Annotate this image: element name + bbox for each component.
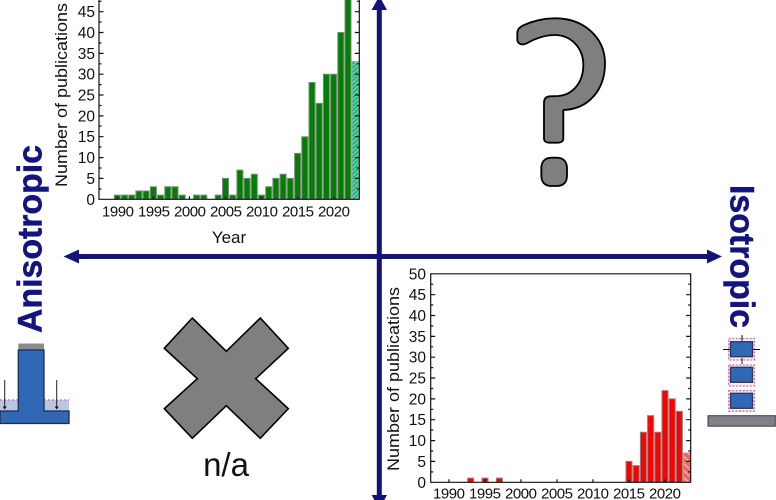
y axis tick labels: 45 xyxy=(409,287,426,304)
pillar and base xyxy=(0,350,69,424)
icon: isotropic stacked blocks on plate xyxy=(708,335,775,426)
y axis tick labels xyxy=(78,4,95,209)
y axis tick labels: 25 xyxy=(409,370,426,388)
arrow: vertical double-headed axis xyxy=(372,0,387,500)
y axis title: Number of publications xyxy=(53,3,71,187)
x axis tick labels: 2010 xyxy=(246,204,278,220)
y axis tick labels: 20 xyxy=(78,108,95,125)
y axis tick labels: 25 xyxy=(78,88,95,104)
y axis tick labels: 0 xyxy=(417,475,426,492)
x axis tick labels: 1995 xyxy=(138,204,170,220)
x axis tick labels: 2015 xyxy=(282,204,314,220)
heading: Isotropic: Isotropic xyxy=(723,185,761,328)
x axis tick labels xyxy=(102,204,350,220)
x axis title: Year xyxy=(212,228,247,247)
y axis tick labels: 30 xyxy=(409,350,426,367)
pillar cap xyxy=(18,344,44,350)
y axis title: Number of publications xyxy=(385,287,403,471)
label: n/a: n/a xyxy=(203,446,250,483)
top block with pink dashed shell xyxy=(729,338,754,360)
axes and ticks xyxy=(431,274,691,482)
y axis tick labels: 40 xyxy=(78,25,95,42)
bar: 2023 partial year, hatched xyxy=(352,62,358,199)
y axis tick labels: 5 xyxy=(417,454,426,471)
liquid layer xyxy=(0,400,69,411)
chart: anisotropic publications per year xyxy=(53,0,359,247)
y axis tick labels: 10 xyxy=(409,433,426,450)
icon: cross xyxy=(164,318,288,438)
y axis tick labels: 15 xyxy=(409,412,426,429)
dotted interface line xyxy=(0,399,69,401)
x axis tick labels: 2000 xyxy=(174,204,206,220)
y axis tick labels xyxy=(409,266,426,492)
bars: green publication counts xyxy=(114,0,351,199)
y axis tick labels: 50 xyxy=(409,266,426,283)
down arrows xyxy=(5,380,57,407)
y axis tick labels: 20 xyxy=(409,391,426,408)
middle block with pink dashed shell xyxy=(729,365,754,386)
y axis tick labels: 40 xyxy=(409,308,426,325)
bottom block with pink dashed shell xyxy=(729,391,754,411)
x axis tick labels xyxy=(433,486,681,500)
y axis tick labels: 35 xyxy=(409,329,426,346)
x axis tick labels: 1990 xyxy=(102,204,134,220)
icon: anisotropic pillar on substrate xyxy=(0,344,69,424)
x axis tick labels: 2005 xyxy=(210,204,242,220)
bar: 2023 partial year, hatched xyxy=(684,453,690,482)
icon: question mark xyxy=(517,18,605,186)
y axis tick labels: 45 xyxy=(78,4,95,21)
heading: Anisotropic: Anisotropic xyxy=(12,145,50,333)
bars: red publication counts xyxy=(468,391,682,482)
y axis tick labels: 30 xyxy=(78,67,95,84)
y axis tick labels: 15 xyxy=(78,129,95,146)
gray plate xyxy=(708,416,775,426)
axes and ticks xyxy=(99,0,359,199)
compression arrows around top block xyxy=(723,335,760,364)
y axis tick labels: 35 xyxy=(78,46,95,63)
y axis tick labels: 10 xyxy=(78,150,95,167)
y axis tick labels: 5 xyxy=(86,171,95,188)
chart: isotropic publications per year xyxy=(385,266,691,500)
y axis tick labels: 0 xyxy=(86,192,95,209)
x axis tick labels: 2020 xyxy=(318,204,350,220)
arrow: horizontal double-headed axis xyxy=(64,250,722,264)
